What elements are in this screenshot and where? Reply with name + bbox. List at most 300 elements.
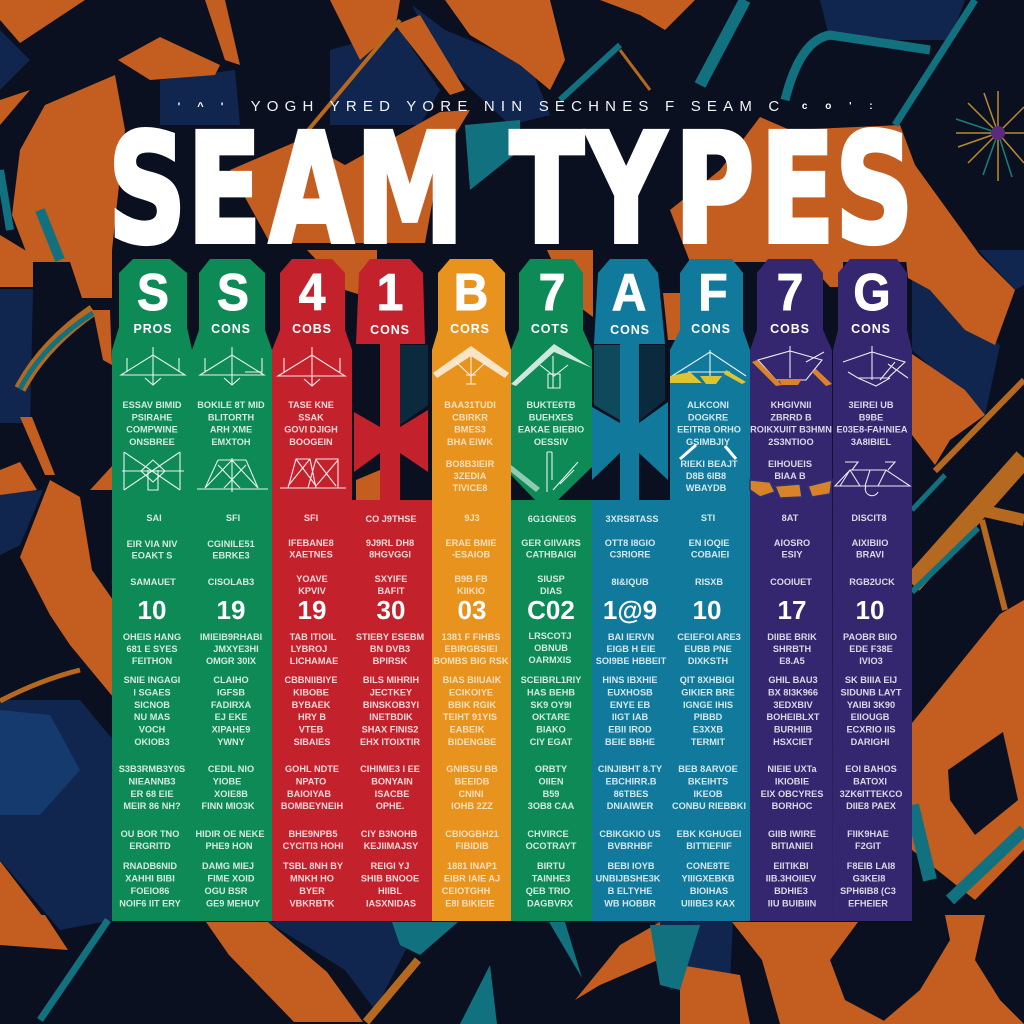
column 5: orange: 3ZEDIA <box>454 471 487 481</box>
column 10: purple: YAIBI 3K90 <box>847 700 895 710</box>
column 1: green: OHEIS HANG <box>123 632 181 642</box>
title: SEAM TYPES <box>108 103 913 278</box>
column 9: purple: BURHIIB <box>774 725 813 735</box>
column 3: red: BOOGEIN <box>289 437 333 447</box>
column 5: orange: GNIBSU BB <box>446 764 498 774</box>
column 2: green: XIPAHE9 <box>212 725 250 735</box>
column 7: teal, cut-out stem: EIGB H EIE <box>606 644 656 654</box>
column 9: purple: ESIY <box>782 550 802 560</box>
column 6: green with cut corners: GER GIIVARS <box>521 538 581 548</box>
column 4: red, cut-out stem: CONS <box>370 323 410 337</box>
column 7: teal, cut-out stem: HINS IBXHIE <box>602 675 658 685</box>
column 3: red: 19 <box>298 595 326 625</box>
column 5: orange: CBIOGBH21 <box>445 829 499 839</box>
column 8: teal: IGNGE IHIS <box>683 700 733 710</box>
column 5: orange: BIAS BIIUAIK <box>443 675 501 685</box>
column 1: green: I SGAES <box>133 687 171 697</box>
column 8: teal: EBK KGHUGEI <box>677 829 741 839</box>
column 5: orange <box>432 259 511 921</box>
column 9: purple: 3EDXBIV <box>773 700 814 710</box>
column 3: red: TASE KNE <box>288 400 334 410</box>
column 8: teal: WBAYDB <box>686 483 727 493</box>
column 2: green: GE9 MEHUY <box>206 898 260 908</box>
column 8: teal: EUBB PNE <box>684 644 732 654</box>
column 2: green: BOKILE 8T MID <box>197 400 265 410</box>
column 8: teal: YIIIGXEBKB <box>681 874 735 884</box>
column 8: teal: BITTIEFIIF <box>686 841 732 851</box>
column 6: green with cut corners: LRSCOTJ <box>529 631 571 641</box>
column 8: teal: STI <box>701 513 715 523</box>
column 6: green with cut corners: OBNUB <box>534 643 568 653</box>
column 3: red: VBKRBTK <box>290 898 335 908</box>
column 5: orange: BAA31TUDI <box>444 400 496 410</box>
column 6: green with cut corners: OARMXIS <box>529 655 571 665</box>
column 4: red, cut-out stem: 1 <box>377 263 403 321</box>
column 9: purple: SHRBTH <box>773 644 812 654</box>
column 10: purple: CONS <box>851 322 891 336</box>
column 4: red, cut-out stem: SHIB BNOOE <box>361 874 419 884</box>
column 4: red, cut-out stem: OPHE. <box>376 801 404 811</box>
column 5: orange: CEIOTGHH <box>442 886 491 896</box>
column 2: green: JMXYE3HI <box>213 644 259 654</box>
column 7: teal, cut-out stem: WB HOBBR <box>604 898 656 908</box>
column 4: red, cut-out stem: ISACBE <box>375 789 409 799</box>
column 6: green with cut corners: SCEIBRL1RIY <box>521 675 581 685</box>
column 5: orange: TIVICE8 <box>453 483 487 493</box>
column 9: purple: 2S3NTIOO <box>768 437 814 447</box>
column 10: purple: RGB2UCK <box>849 577 895 587</box>
column 9: purple: DIIBE BRIK <box>767 632 817 642</box>
column 10: purple: EFHEIER <box>848 898 888 908</box>
column 6: green with cut corners <box>511 259 592 921</box>
column 1: green: NOIF6 IIT ERY <box>119 898 181 908</box>
column 3: red: YOAVE <box>296 574 328 584</box>
column 6: green with cut corners: HAS BEHB <box>527 687 575 697</box>
column 6: green with cut corners: 3OB8 CAA <box>528 801 575 811</box>
column 9: purple <box>750 259 832 921</box>
column 4: red, cut-out stem: INETBDIK <box>369 712 413 722</box>
column 5: orange: BMES3 <box>454 425 486 435</box>
column 5: orange: B9B FB <box>454 574 488 584</box>
column 5: orange: TEIHT 91YIS <box>443 712 497 722</box>
column 5: orange: CNINI <box>458 789 484 799</box>
subtitle: YOGH YRED YORE NIN SECHNES F SEAM C <box>251 98 785 115</box>
column 3: red: HRY B <box>298 712 326 722</box>
column 3: red: CYCITI3 HOHI <box>283 841 343 851</box>
column 2: green: CLAIHO <box>213 675 249 685</box>
column 4: red, cut-out stem: CIY B3NOHB <box>361 829 417 839</box>
column 1: green: FEITHON <box>132 656 173 666</box>
column 8: teal: ALKCONI <box>687 400 729 410</box>
column 8: teal <box>670 259 750 921</box>
column 5: orange: BEEIDB <box>455 776 490 786</box>
column 8: teal: D8B 6IB8 <box>686 471 726 481</box>
column 2: green: FINN MIO3K <box>201 801 255 811</box>
column 2: green: YWNY <box>217 737 245 747</box>
column 9: purple: BITIANIEI <box>771 841 813 851</box>
column 9: purple: IIB.3HOIIEV <box>766 874 817 884</box>
column 7: teal, cut-out stem: CINJIBHT 8.TY <box>598 764 662 774</box>
column 4: red, cut-out stem: JECTKEY <box>370 687 412 697</box>
column 6: green with cut corners: EAKAE BIEBIO <box>518 425 584 435</box>
column 1: green: S <box>137 263 169 321</box>
column 2: green: 19 <box>217 595 245 625</box>
column 4: red, cut-out stem: REIGI YJ <box>371 861 409 871</box>
column 2: green: S <box>217 263 249 321</box>
column 7: teal, cut-out stem: EBII IROD <box>608 725 652 735</box>
column 10: purple: 3EIREI UB <box>849 400 893 410</box>
column 10: purple: ECXRIO IIS <box>846 725 896 735</box>
column 8: teal: RISXB <box>695 577 723 587</box>
column 4: red, cut-out stem: CO J9THSE <box>365 514 417 524</box>
column 4: red, cut-out stem: 8HGVGGI <box>369 550 411 560</box>
column 8: teal: F <box>698 263 728 321</box>
column 10: purple: BRAVI <box>856 550 884 560</box>
column 9: purple: COBS <box>770 322 810 336</box>
column 1: green: SICNOB <box>134 700 170 710</box>
column 1: green: OKIOB3 <box>134 737 170 747</box>
column 5: orange: BO8B3IEIR <box>446 459 494 469</box>
column 5: orange: B <box>454 263 488 321</box>
column 2: green: IMIEIB9RHABI <box>200 632 262 642</box>
column 4: red, cut-out stem: BONYAIN <box>371 776 413 786</box>
column 3: red: NPATO <box>296 776 326 786</box>
column 4: red, cut-out stem: SHAX FINIS2 <box>362 725 418 735</box>
column 8: teal: CONE8TE <box>686 861 730 871</box>
column 7: teal, cut-out stem: 3XRS8TASS <box>606 514 658 524</box>
column 6: green with cut corners: C02 <box>527 595 575 625</box>
subtitle: c o ' : <box>802 101 880 112</box>
column 7: teal, cut-out stem: CONS <box>610 323 650 337</box>
column 9: purple: HSXCIET <box>773 737 813 747</box>
column 8: teal: 10 <box>693 595 721 625</box>
column 1: green: SAI <box>146 513 162 523</box>
column 3: red: LYBROJ <box>291 644 327 654</box>
column 8: teal: EEITRB ORHO <box>677 425 741 435</box>
column 8: teal: BIOIHAS <box>690 886 728 896</box>
column 6: green with cut corners: B59 <box>543 789 559 799</box>
column 5: orange: FIBIDIB <box>455 841 489 851</box>
column 3: red: GOVI DJIGH <box>284 425 338 435</box>
column 6: green with cut corners: BUEHXES <box>529 412 573 422</box>
column 6: green with cut corners: CIY EGAT <box>530 737 573 747</box>
column 6: green with cut corners: DIAS <box>540 586 562 596</box>
column 9: purple: 7 <box>777 263 803 321</box>
column 4: red, cut-out stem: 9J9RL DH8 <box>366 538 414 548</box>
column 9: purple: EIITIKBI <box>773 861 809 871</box>
column 1: green: PROS <box>133 322 173 336</box>
column 1: green: ONSBREE <box>129 437 175 447</box>
column 8: teal: PIBBD <box>694 712 723 722</box>
column 9: purple: 17 <box>778 595 806 625</box>
column 5: orange: IOHB 2ZZ <box>451 801 493 811</box>
column 8: teal: CONBU RIEBBKI <box>672 801 746 811</box>
column 3: red: XAETNES <box>289 550 333 560</box>
column 10: purple: 10 <box>856 595 884 625</box>
column 7: teal, cut-out stem: 86TBES <box>614 789 648 799</box>
column 2: green: CISOLAB3 <box>208 577 254 587</box>
column 1: green: VOCH <box>139 725 166 735</box>
column 3: red: TSBL 8NH BY <box>283 861 343 871</box>
column 6: green with cut corners: ORBTY <box>535 764 567 774</box>
column 6: green with cut corners: OKTARE <box>532 712 570 722</box>
column 2: green: OMGR 30IX <box>206 656 257 666</box>
column 3: red: BOMBEYNEIH <box>281 801 344 811</box>
column 10: purple: FIIK9HAE <box>847 829 889 839</box>
column 1: green: ESSAV BIMID <box>122 400 182 410</box>
column 1: green: FOEIO86 <box>131 886 169 896</box>
column 1: green: ER 68 EIE <box>131 789 173 799</box>
column 2: green: ARH XME <box>210 425 252 435</box>
column 2: green: HIDIR OE NEKE <box>196 829 264 839</box>
column 1: green: 10 <box>138 595 166 625</box>
column 5: orange: 9J3 <box>464 513 480 523</box>
column 6: green with cut corners: OESSIV <box>534 437 569 447</box>
column 7: teal, cut-out stem: 1@9 <box>603 595 657 625</box>
column 10: purple: IVIO3 <box>859 656 883 666</box>
column 10: purple: DIIE8 PAEX <box>846 801 897 811</box>
column 10: purple: G <box>853 263 891 321</box>
column 6: green with cut corners: 6G1GNE0S <box>528 514 576 524</box>
subtitle: ' ^ ' <box>178 101 230 113</box>
column 7: teal, cut-out stem: BAI IERVN <box>608 632 654 642</box>
column 7: teal, cut-out stem: EBCHIRR.B <box>605 776 657 786</box>
column 7: teal, cut-out stem: B ELTYHE <box>608 886 652 896</box>
column 6: green with cut corners: BIRTU <box>537 861 565 871</box>
column 1: green: MEIR 86 NH? <box>123 801 181 811</box>
column 5: orange: BBIK RGIK <box>448 700 496 710</box>
column 10: purple: EDE F38E <box>849 644 893 654</box>
column 1: green: NIEANNB3 <box>129 776 175 786</box>
column 6: green with cut corners: 7 <box>539 263 565 321</box>
column 7: teal, cut-out stem: SOI9BE HBBEIT <box>596 656 667 666</box>
column 3: red: BHE9NPB5 <box>288 829 338 839</box>
column 9: purple: NIEIE UXTa <box>767 764 817 774</box>
column 4: red, cut-out stem: KEJIIMAJSY <box>364 841 418 851</box>
column 5: orange: KIIKIO <box>457 586 485 596</box>
column 3: red: MNKH HO <box>290 874 334 884</box>
column 2: green: FIME XOID <box>208 874 255 884</box>
column 7: teal, cut-out stem: BEBI IOYB <box>608 861 654 871</box>
column 8: teal: E3XXB <box>693 725 723 735</box>
column 9: purple: BOHEIBLXT <box>766 712 820 722</box>
column 2: green: CEDIL NIO <box>208 764 254 774</box>
column 1: green: EIR VIA NIV <box>127 539 177 549</box>
column 5: orange: EABEIK <box>450 725 485 735</box>
column 2: green: FADIRXA <box>211 700 252 710</box>
column 7: teal, cut-out stem: C3RIORE <box>610 550 650 560</box>
column 4: red, cut-out stem: IASXNIDAS <box>366 898 416 908</box>
column 10: purple: E03E8-FAHNIEA <box>837 425 908 435</box>
column 5: orange: BHA EIWK <box>447 437 493 447</box>
column 10: purple: SIDUNB LAYT <box>841 687 902 697</box>
column 4: red, cut-out stem <box>352 259 432 921</box>
column 7: teal, cut-out stem: UNBIJBSHE3K <box>596 874 661 884</box>
column 3: red: IFEBANE8 <box>288 538 334 548</box>
column 9: purple: KHGIVNII <box>771 400 811 410</box>
column 6: green with cut corners: TAINHE3 <box>532 874 570 884</box>
column 4: red, cut-out stem: STIEBY ESEBM <box>356 632 424 642</box>
column 1: green: S3B3RMB3Y0S <box>119 764 185 774</box>
column 1: green: ERGRITD <box>129 841 171 851</box>
column 9: purple: GHIL BAU3 <box>768 675 818 685</box>
column 9: purple: E8.A5 <box>779 656 805 666</box>
column 3: red: SSAK <box>298 412 324 422</box>
icon: starburst <box>956 91 1024 181</box>
column 1: green: XAHHI BIBI <box>125 874 175 884</box>
column 8: teal: GSIMBJIY <box>686 437 730 447</box>
column 6: green with cut corners: BUKTE6TB <box>526 400 576 410</box>
column 9: purple: ZBRRD B <box>770 412 812 422</box>
column 1: green: PSIRAHE <box>132 412 172 422</box>
column 6: green with cut corners: CHVIRCE <box>527 829 569 839</box>
column 4: red, cut-out stem: BILS MIHRIH <box>363 675 419 685</box>
column 9: purple: AIOSRO <box>774 538 810 548</box>
column 10: purple: EIIOUGB <box>851 712 890 722</box>
column 7: teal, cut-out stem: CBIKGKIO US <box>599 829 661 839</box>
column 8: teal: DOGKRE <box>688 412 728 422</box>
column 3: red: BAIOIYAB <box>287 789 331 799</box>
column 3: red: SIBAIES <box>294 737 330 747</box>
column 3: red: COBS <box>292 322 332 336</box>
column 3: red: VTEB <box>299 725 324 735</box>
column 7: teal, cut-out stem: BVBRHBF <box>608 841 653 851</box>
column 10: purple: G3KEI8 <box>853 874 885 884</box>
column 3: red <box>272 259 352 921</box>
column 2: green: IGFSB <box>217 687 245 697</box>
column 5: orange: 1881 INAP1 <box>447 861 497 871</box>
column 1: green: SAMAUET <box>130 577 176 587</box>
column 10: purple: B9BE <box>859 412 883 422</box>
column 5: orange: ECIKOIYE <box>449 687 493 697</box>
column 4: red, cut-out stem: EHX ITOIXTIR <box>360 737 420 747</box>
column 5: orange: ERAE BMIE <box>445 538 497 548</box>
column 2: green: DAMG MIEJ <box>202 861 254 871</box>
column 6: green with cut corners: OIIEN <box>538 776 564 786</box>
column 6: green with cut corners: COTS <box>531 322 569 336</box>
column 10: purple: AIXIBIIO <box>852 538 888 548</box>
column 5: orange: EIBR IAIE AJ <box>444 874 500 884</box>
column 3: red: KPVIV <box>298 586 327 596</box>
column 3: red: LICHAMAE <box>290 656 338 666</box>
column 9: purple: ROIKXUIIT B3HMN <box>750 425 832 435</box>
column 8: teal: CEIEFOI ARE3 <box>677 632 741 642</box>
column 3: red: BYER <box>299 886 325 896</box>
column 8: teal: TERMIT <box>691 737 725 747</box>
column 9: purple: EIHOUEIS <box>768 459 812 469</box>
column 9: purple: EIX OBCYRES <box>761 789 823 799</box>
column 10: purple: SK BIIIA EIJ <box>845 675 897 685</box>
column 8: teal: DIXKSTH <box>688 656 729 666</box>
column 2: green: XOIE8B <box>214 789 248 799</box>
column 1: green: EOAKT S <box>132 550 172 560</box>
column 10: purple: F2GIT <box>855 841 881 851</box>
column 9: purple: BX 8I3K966 <box>768 687 818 697</box>
column 9: purple: BORHOC <box>772 801 813 811</box>
column 1: green <box>112 259 192 921</box>
column 9: purple: BDHIE3 <box>774 886 808 896</box>
column 7: teal, cut-out stem: ENYE EB <box>610 700 651 710</box>
column 6: green with cut corners: DAGBVRX <box>527 898 574 908</box>
column 2: green: BLITORTH <box>208 412 254 422</box>
column 2: green: YIOBE <box>213 776 241 786</box>
column 8: teal: BEB 8ARVOE <box>678 764 738 774</box>
column 2: green: CONS <box>211 322 251 336</box>
column 7: teal, cut-out stem: A <box>612 263 646 321</box>
column 5: orange: CBIRKR <box>452 412 488 422</box>
column 10: purple: DISCIT8 <box>851 513 887 523</box>
column 8: teal: UIIIBE3 KAX <box>681 898 736 908</box>
column 8: teal: CONS <box>691 322 731 336</box>
column 10: purple: F8EIB LAI8 <box>847 861 895 871</box>
column 5: orange: CORS <box>450 322 490 336</box>
column 9: purple: IIU BUIBIIN <box>768 898 817 908</box>
column 5: orange: E8I BIKIEIE <box>445 898 495 908</box>
column 4: red, cut-out stem: BN DVB3 <box>370 644 410 654</box>
column 9: purple: IKIOBIE <box>775 776 809 786</box>
column 10: purple: PAOBR BIIO <box>843 632 897 642</box>
column 7: teal, cut-out stem: OTT8 I8GIO <box>605 538 655 548</box>
column 4: red, cut-out stem: SXYIFE <box>375 574 407 584</box>
column 1: green: SNIE INGAGI <box>124 675 180 685</box>
column 2: green: OGU BSR <box>205 886 248 896</box>
column 5: orange: -ESAIOB <box>452 550 491 560</box>
column 3: red: GOHL NDTE <box>285 764 339 774</box>
column 10: purple: 3ZK6ITTEKCO <box>840 789 902 799</box>
column 4: red, cut-out stem: BINSKOB3YI <box>363 700 419 710</box>
column 8: teal: BKEIHTS <box>688 776 728 786</box>
column 7: teal, cut-out stem: IIGT IAB <box>612 712 648 722</box>
column 10: purple: DARIGHI <box>851 737 889 747</box>
column 7: teal, cut-out stem: BEIE BBHE <box>605 737 655 747</box>
column 9: purple: 8AT <box>782 513 799 523</box>
column 7: teal, cut-out stem: DNIAIWER <box>607 801 654 811</box>
column 1: green: OU BOR TNO <box>121 829 179 839</box>
column 6: green with cut corners: SIUSP <box>537 574 565 584</box>
column 1: green: NU MAS <box>134 712 170 722</box>
column 2: green: SFI <box>226 513 240 523</box>
column 3: red: TAB ITIOIL <box>290 632 336 642</box>
column 10: purple: BATOXI <box>853 776 887 786</box>
column 9: purple: GIIB IWIRE <box>768 829 816 839</box>
column 4: red, cut-out stem: BAFIT <box>377 586 405 596</box>
column 1: green: COMPWINE <box>126 425 178 435</box>
column 2: green: CGINILE51 <box>207 539 255 549</box>
column 7: teal, cut-out stem: 8I&IQUB <box>611 577 649 587</box>
column 4: red, cut-out stem: CIHIMIE3 I EE <box>360 764 420 774</box>
column 3: red: SFI <box>304 513 318 523</box>
column 6: green with cut corners: QEB TRIO <box>526 886 570 896</box>
column 3: red: KIBOBE <box>293 687 329 697</box>
column 8: teal: GIKIER BRE <box>681 687 735 697</box>
column 8: teal: EN IOQIE <box>689 538 729 548</box>
column 4: red, cut-out stem: HIIBL <box>378 886 402 896</box>
column 3: red: BYBAEK <box>292 700 331 710</box>
column 9: purple: COOIUET <box>770 577 812 587</box>
column 8: teal: RIEKI BEAJT <box>680 459 738 469</box>
column 7: teal, cut-out stem <box>592 259 670 921</box>
column 2: green: EBRKE3 <box>212 550 250 560</box>
column 2: green: PHE9 HON <box>206 841 253 851</box>
column 5: orange: BOMBS BIG RSK <box>433 656 509 666</box>
column 4: red, cut-out stem: 30 <box>377 595 405 625</box>
column 8: teal: QIT 8XHBIGI <box>680 675 734 685</box>
column 5: orange: 1381 F FIHBS <box>442 632 500 642</box>
column 5: orange: 03 <box>458 595 486 625</box>
column 7: teal, cut-out stem: EUXHOSB <box>607 687 653 697</box>
column 6: green with cut corners: CATHBAIGI <box>526 550 576 560</box>
column 4: red, cut-out stem: BPIRSK <box>373 656 408 666</box>
